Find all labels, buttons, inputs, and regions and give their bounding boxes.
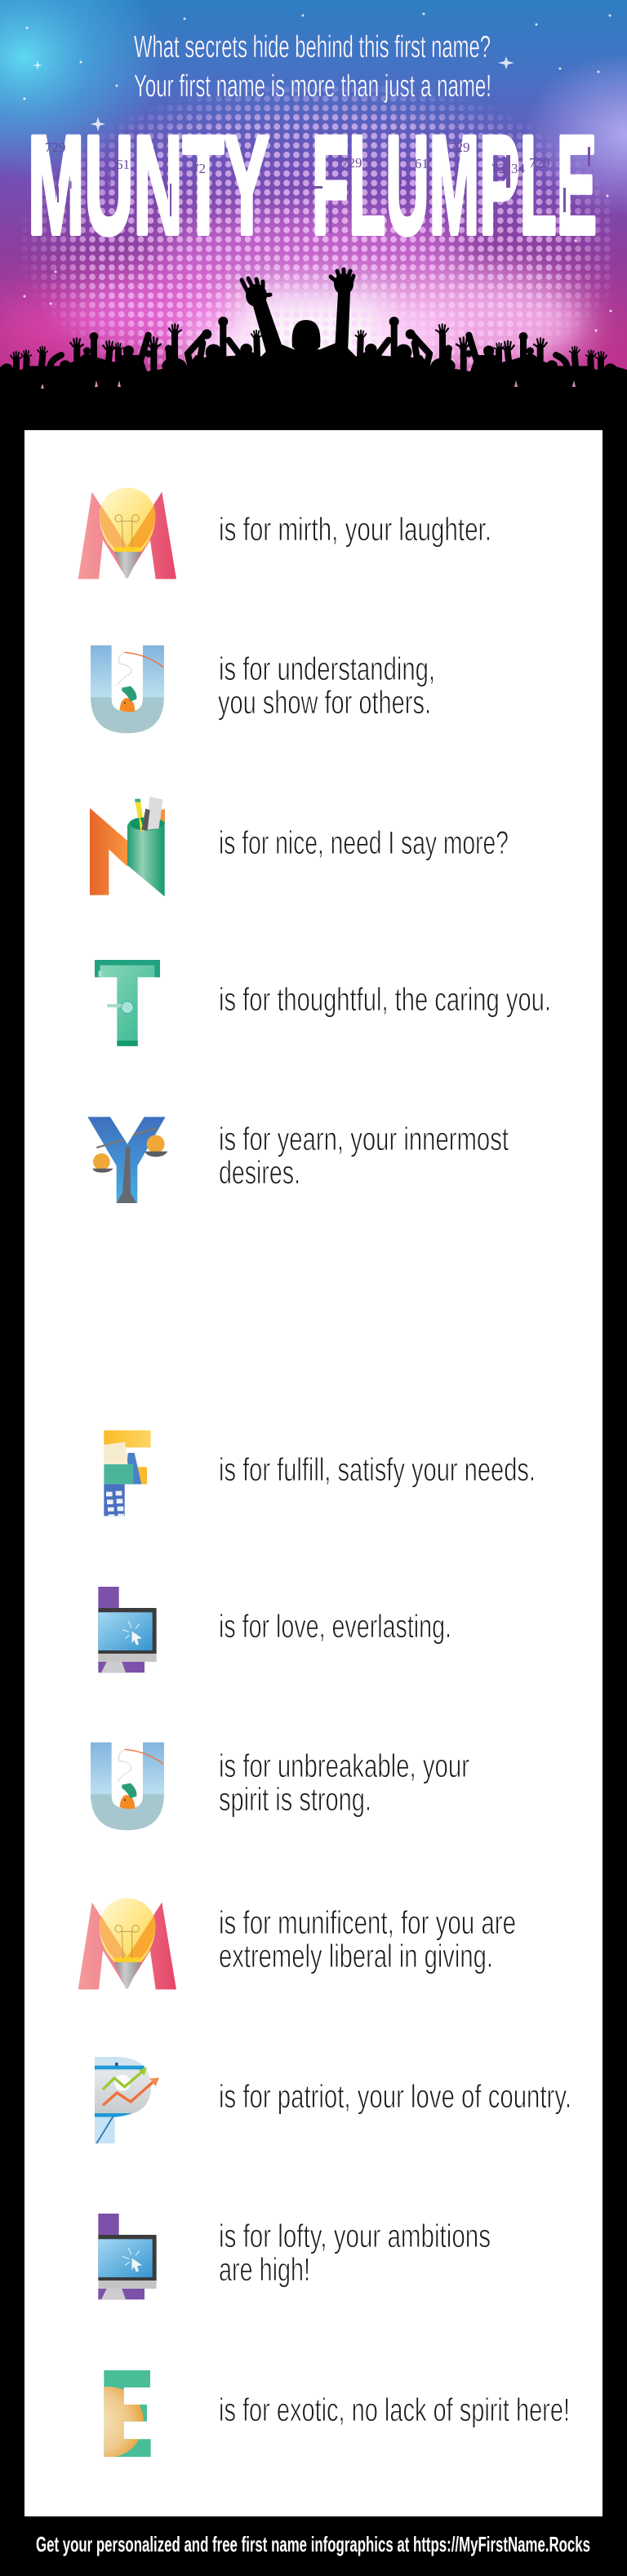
- row T thoughtful: [95, 960, 551, 1046]
- title: name: 72: [491, 161, 505, 176]
- row L love: [98, 1587, 451, 1672]
- title: name: MUNTY: [28, 107, 269, 264]
- text: munificent: is for munificent, for you are: [219, 1905, 516, 1941]
- text: understanding: you show for others.: [218, 685, 431, 721]
- title: name: 61: [415, 156, 429, 171]
- text: understanding: [218, 651, 435, 721]
- text: love: is for love, everlasting.: [219, 1609, 451, 1645]
- icon: letter N with pen cup: [90, 797, 165, 896]
- title: name: 72: [192, 161, 206, 176]
- white content panel: [24, 430, 603, 2516]
- text: munificent: extremely liberal in giving.: [219, 1939, 493, 1974]
- text: lofty: are high!: [219, 2252, 310, 2288]
- row F fulfill: [104, 1430, 536, 1516]
- row M munificent: [78, 1898, 516, 1989]
- text: unbreakable: [219, 1748, 469, 1818]
- crowd silhouette: [0, 269, 627, 441]
- text: yearn: [219, 1121, 509, 1191]
- title: name: 729: [341, 155, 362, 171]
- text: mirth: is for mirth, your laughter.: [219, 512, 491, 548]
- text: yearn: is for yearn, your innermost: [219, 1121, 509, 1157]
- icon: letter M with light bulb: [78, 487, 176, 579]
- row L lofty: [98, 2214, 491, 2299]
- text: understanding: is for understanding,: [219, 651, 435, 687]
- text: nice: is for nice, need I say more?: [219, 825, 509, 861]
- icon: letter L monitor: [98, 1587, 157, 1672]
- row N nice: [90, 797, 509, 896]
- text: unbreakable: spirit is strong.: [219, 1782, 371, 1818]
- title: name: 34: [511, 161, 526, 176]
- icon: letter L monitor: [98, 2214, 157, 2299]
- icon: letter M with light bulb: [78, 1898, 176, 1989]
- title: name: 729: [45, 140, 65, 155]
- text: unbreakable: is for unbreakable, your: [219, 1748, 469, 1784]
- icon: letter P presentation chart: [95, 2057, 159, 2143]
- row Y yearn: [87, 1117, 509, 1203]
- title: name: 729: [529, 155, 550, 171]
- icon: letter F office items: [104, 1430, 151, 1516]
- text: lofty: [219, 2218, 491, 2288]
- icon: letter T door: [95, 960, 160, 1046]
- row M mirth: [78, 487, 491, 579]
- row U understanding: [91, 646, 435, 733]
- icon: letter U with fishing rod: [91, 646, 164, 733]
- text: yearn: desires.: [219, 1155, 300, 1191]
- row U unbreakable: [91, 1743, 469, 1830]
- icon: letter E with moon: [104, 2370, 151, 2457]
- title: name: 61: [116, 157, 130, 172]
- icon: letter U with fishing rod: [91, 1743, 164, 1830]
- row P patriot: [95, 2057, 571, 2143]
- icon: letter Y scales: [87, 1117, 167, 1203]
- row E exotic: [73, 2370, 570, 2458]
- header banner: [0, 0, 627, 408]
- text: lofty: is for lofty, your ambitions: [219, 2218, 491, 2254]
- title: name: 729: [449, 140, 470, 155]
- text: munificent: [219, 1905, 516, 1974]
